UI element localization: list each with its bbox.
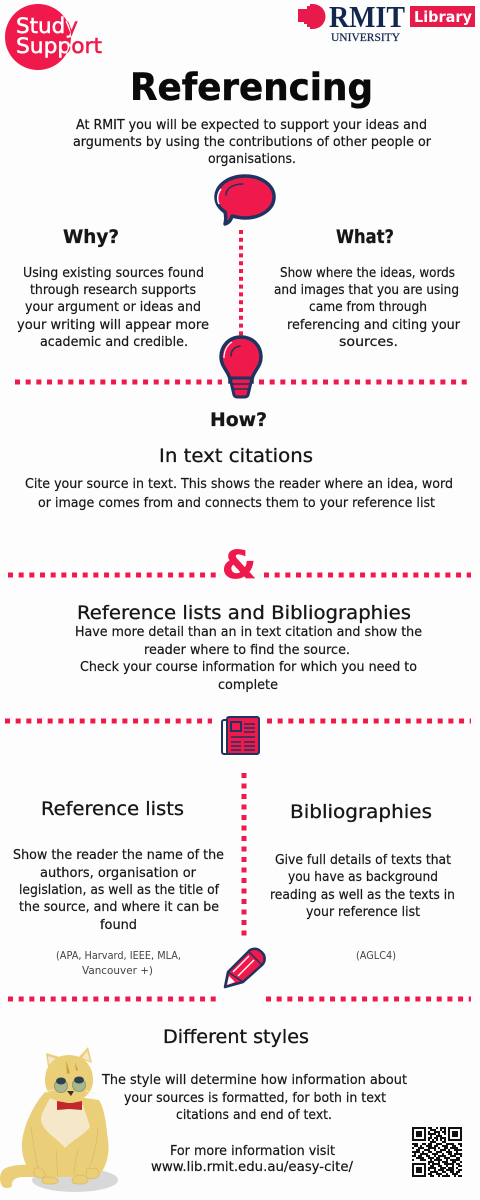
text: in text citations [25, 477, 453, 511]
icon: speech bubble [216, 176, 274, 224]
heading: Different styles: Different styles [163, 1026, 309, 1048]
text: what explanation: came from through [309, 300, 427, 315]
text: bibliographies explanation: you have as background [288, 870, 438, 885]
logo: Study Support: Support [16, 34, 102, 58]
divider: vertical dots bottom [242, 773, 246, 940]
ampersand divider symbol: & [222, 543, 256, 587]
text: different styles explanation: citations and end of text. [176, 1108, 332, 1123]
text: bibliographies explanation: reading as well as the texts in [270, 888, 455, 903]
logo: Study Support: Study [16, 14, 78, 38]
text: what explanation: and images that you are using [274, 283, 459, 298]
text: reference lists and bibliographies: complete [218, 678, 278, 693]
text: reference lists explanation: legislation, as well as the title of [19, 883, 219, 898]
text: why explanation: your argument or ideas and [25, 300, 201, 315]
icon: light bulb [221, 337, 261, 397]
text: different styles explanation: The style will determine how information about [101, 1073, 407, 1088]
text: reference lists and bibliographies: reader where to find the source. [144, 643, 350, 658]
text: why explanation: academic and credible. [40, 335, 188, 350]
heading: What?: What? [336, 226, 394, 248]
heading: In text citations: In text citations [159, 445, 313, 467]
QR code [412, 1127, 462, 1177]
text: reference lists explanation [13, 848, 224, 933]
logo: RMIT University Library: RMIT [329, 0, 405, 34]
text: reference lists explanation: found [100, 918, 137, 933]
heading: Reference lists and Bibliographies: Reference lists and Bibliographies [77, 602, 411, 624]
text: more information link [151, 1144, 354, 1175]
text: reference list styles: Vancouver +) [82, 964, 153, 977]
text: reference lists and bibliographies: Have more detail than an in text citation and show the [75, 625, 422, 640]
text: reference lists explanation: Show the reader the name of the [13, 848, 224, 863]
text: reference lists explanation: authors, organisation or [40, 866, 197, 881]
text: why explanation: your writing will appear more [17, 318, 209, 333]
text: bibliographies explanation: your reference list [306, 905, 420, 920]
logo: RMIT University Library [298, 0, 475, 44]
title: Referencing [130, 66, 373, 109]
text: in text citations: Cite your source in text. This shows the reader where an idea, word [25, 477, 453, 492]
text: reference list styles [56, 949, 181, 977]
logo: Study Support: Study [16, 14, 78, 38]
intro text: organisations. [208, 152, 296, 167]
heading: Bibliographies: Bibliographies [290, 801, 432, 823]
divider: vertical dots top [239, 230, 243, 336]
logo: Study Support [5, 4, 102, 70]
text: bibliography style: (AGLC4) [356, 949, 396, 962]
intro text: At RMIT you will be expected to support your ideas and [76, 118, 427, 133]
logo: RMIT University Library: UNIVERSITY [331, 30, 400, 44]
intro text: arguments by using the contributions of other people or [73, 135, 432, 150]
icon: pencil [225, 949, 265, 987]
logo: RMIT University Library: Library [414, 8, 472, 26]
intro text [73, 118, 432, 167]
text: reference lists explanation: the source, and where it can be [19, 900, 219, 915]
text: more information link: For more information visit [170, 1144, 335, 1159]
text: reference lists and bibliographies: Check your course information for which you need to [80, 660, 417, 675]
heading: Reference lists: Reference lists [41, 798, 184, 820]
text: reference lists and bibliographies [75, 625, 422, 693]
text: what explanation [274, 266, 461, 350]
text: why explanation [17, 266, 209, 350]
text: different styles explanation: your sources is formatted, for both in text [124, 1091, 386, 1106]
text: what explanation: referencing and citing your [287, 318, 461, 333]
divider: dots row 4 [8, 996, 471, 1002]
divider: dots row 1 [15, 380, 471, 384]
text: bibliographies explanation [270, 853, 455, 920]
heading: How?: How? [210, 409, 267, 431]
logo: Study Support: Support [16, 34, 102, 58]
text: reference list styles: (APA, Harvard, IEEE, MLA, [56, 949, 181, 962]
divider: dots row 2 [8, 572, 471, 578]
icon: newspaper [222, 717, 259, 754]
text: more information link: www.lib.rmit.edu.au/easy-cite/ [151, 1160, 354, 1175]
illustration: cat with glasses and bow tie [0, 1047, 118, 1192]
text: what explanation: sources. [339, 335, 398, 350]
text: why explanation: Using existing sources found [23, 266, 204, 281]
heading: Why?: Why? [63, 226, 119, 248]
text: bibliographies explanation: Give full details of texts that [275, 853, 451, 868]
text: what explanation: Show where the ideas, words [280, 266, 455, 281]
text: why explanation: through research supports [30, 283, 196, 298]
divider: dots row 3 [5, 718, 471, 724]
text: in text citations: or image comes from and connects them to your reference list [38, 496, 435, 511]
text: different styles explanation [101, 1073, 407, 1123]
